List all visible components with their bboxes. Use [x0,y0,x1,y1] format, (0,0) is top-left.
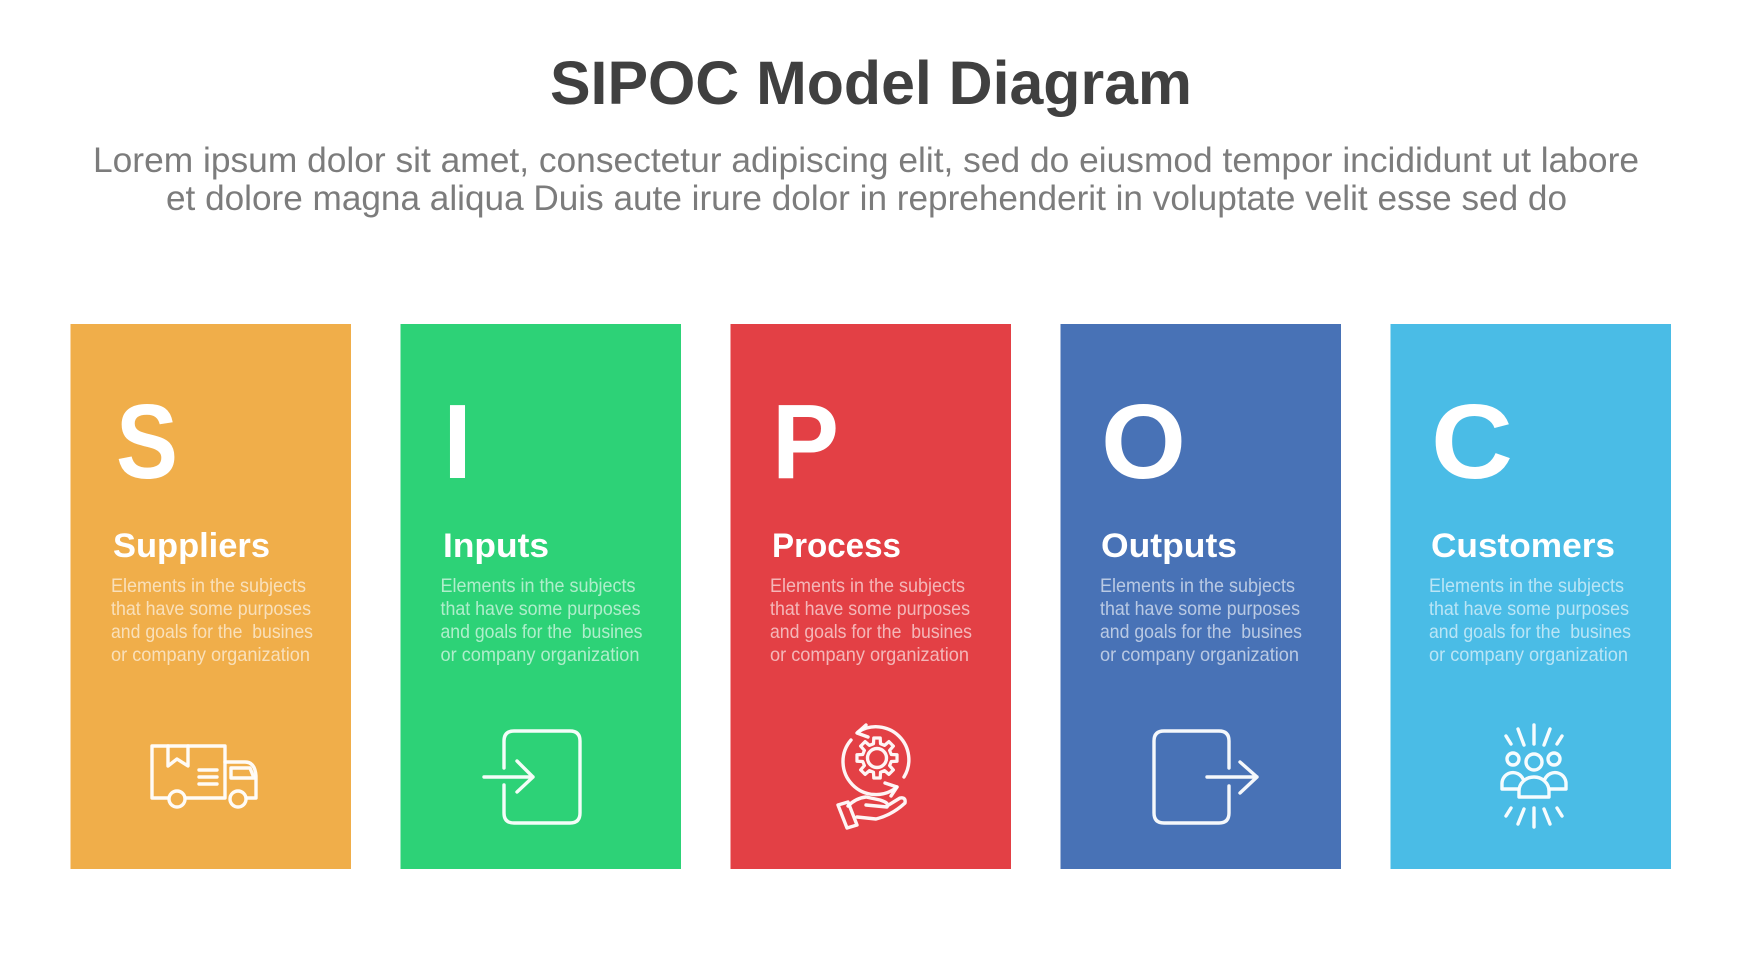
customers card background [1390,324,1671,869]
customers description: that have some purposes [1429,598,1629,620]
panel: customers [1390,324,1671,869]
letter C: C [1431,383,1513,501]
inputs description: and goals for the busines [440,621,643,643]
icon: arrow leaving box [1154,731,1257,823]
outputs card background [1060,324,1341,869]
process description: and goals for the busines [770,621,972,643]
inputs heading: Inputs [443,527,549,565]
suppliers description: that have some purposes [111,598,311,620]
process description: or company organization [770,644,969,666]
customers heading: Customers [1431,527,1615,565]
suppliers description: Elements in the subjects [111,575,306,597]
process description: Elements in the subjects [770,575,965,597]
title: SIPOC Model Diagram [550,49,1192,117]
letter S: S [116,383,178,501]
icon: customer group with rays [1502,725,1566,827]
customers description: or company organization [1429,644,1628,666]
suppliers description: and goals for the busines [111,621,313,643]
suppliers description [111,575,313,666]
panel: suppliers [70,324,351,869]
outputs description [1100,575,1302,666]
inputs description: that have some purposes [440,598,641,620]
subtitle text: et dolore magna aliqua Duis aute irure dolor in reprehenderit in voluptate velit esse sed do [166,179,1567,218]
suppliers card background [70,324,351,869]
subtitle text [93,141,1639,218]
customers description: Elements in the subjects [1429,575,1624,597]
panel: inputs [400,324,681,869]
outputs description: and goals for the busines [1100,621,1302,643]
inputs description: or company organization [440,644,640,666]
outputs description: that have some purposes [1100,598,1300,620]
inputs description: Elements in the subjects [440,575,636,597]
panel: outputs [1060,324,1341,869]
inputs description [440,575,643,666]
suppliers heading: Suppliers [113,527,270,565]
outputs heading: Outputs [1101,527,1237,565]
inputs card background [400,324,681,869]
outputs description: Elements in the subjects [1100,575,1295,597]
panel: process [730,324,1011,869]
subtitle text: Lorem ipsum dolor sit amet, consectetur adipiscing elit, sed do eiusmod tempor incididunt ut labore [93,141,1639,180]
process card background [730,324,1011,869]
process description: that have some purposes [770,598,970,620]
letter O: O [1101,383,1186,501]
letter P: P [772,383,839,501]
customers description: and goals for the busines [1429,621,1631,643]
icon: arrow entering box [484,731,580,823]
icon: gear with arrows over hand [838,725,909,828]
icon: delivery truck [152,746,256,807]
letter I: I [443,383,472,501]
customers description [1429,575,1631,666]
suppliers description: or company organization [111,644,310,666]
outputs description: or company organization [1100,644,1299,666]
process heading: Process [772,527,901,565]
process description [770,575,972,666]
